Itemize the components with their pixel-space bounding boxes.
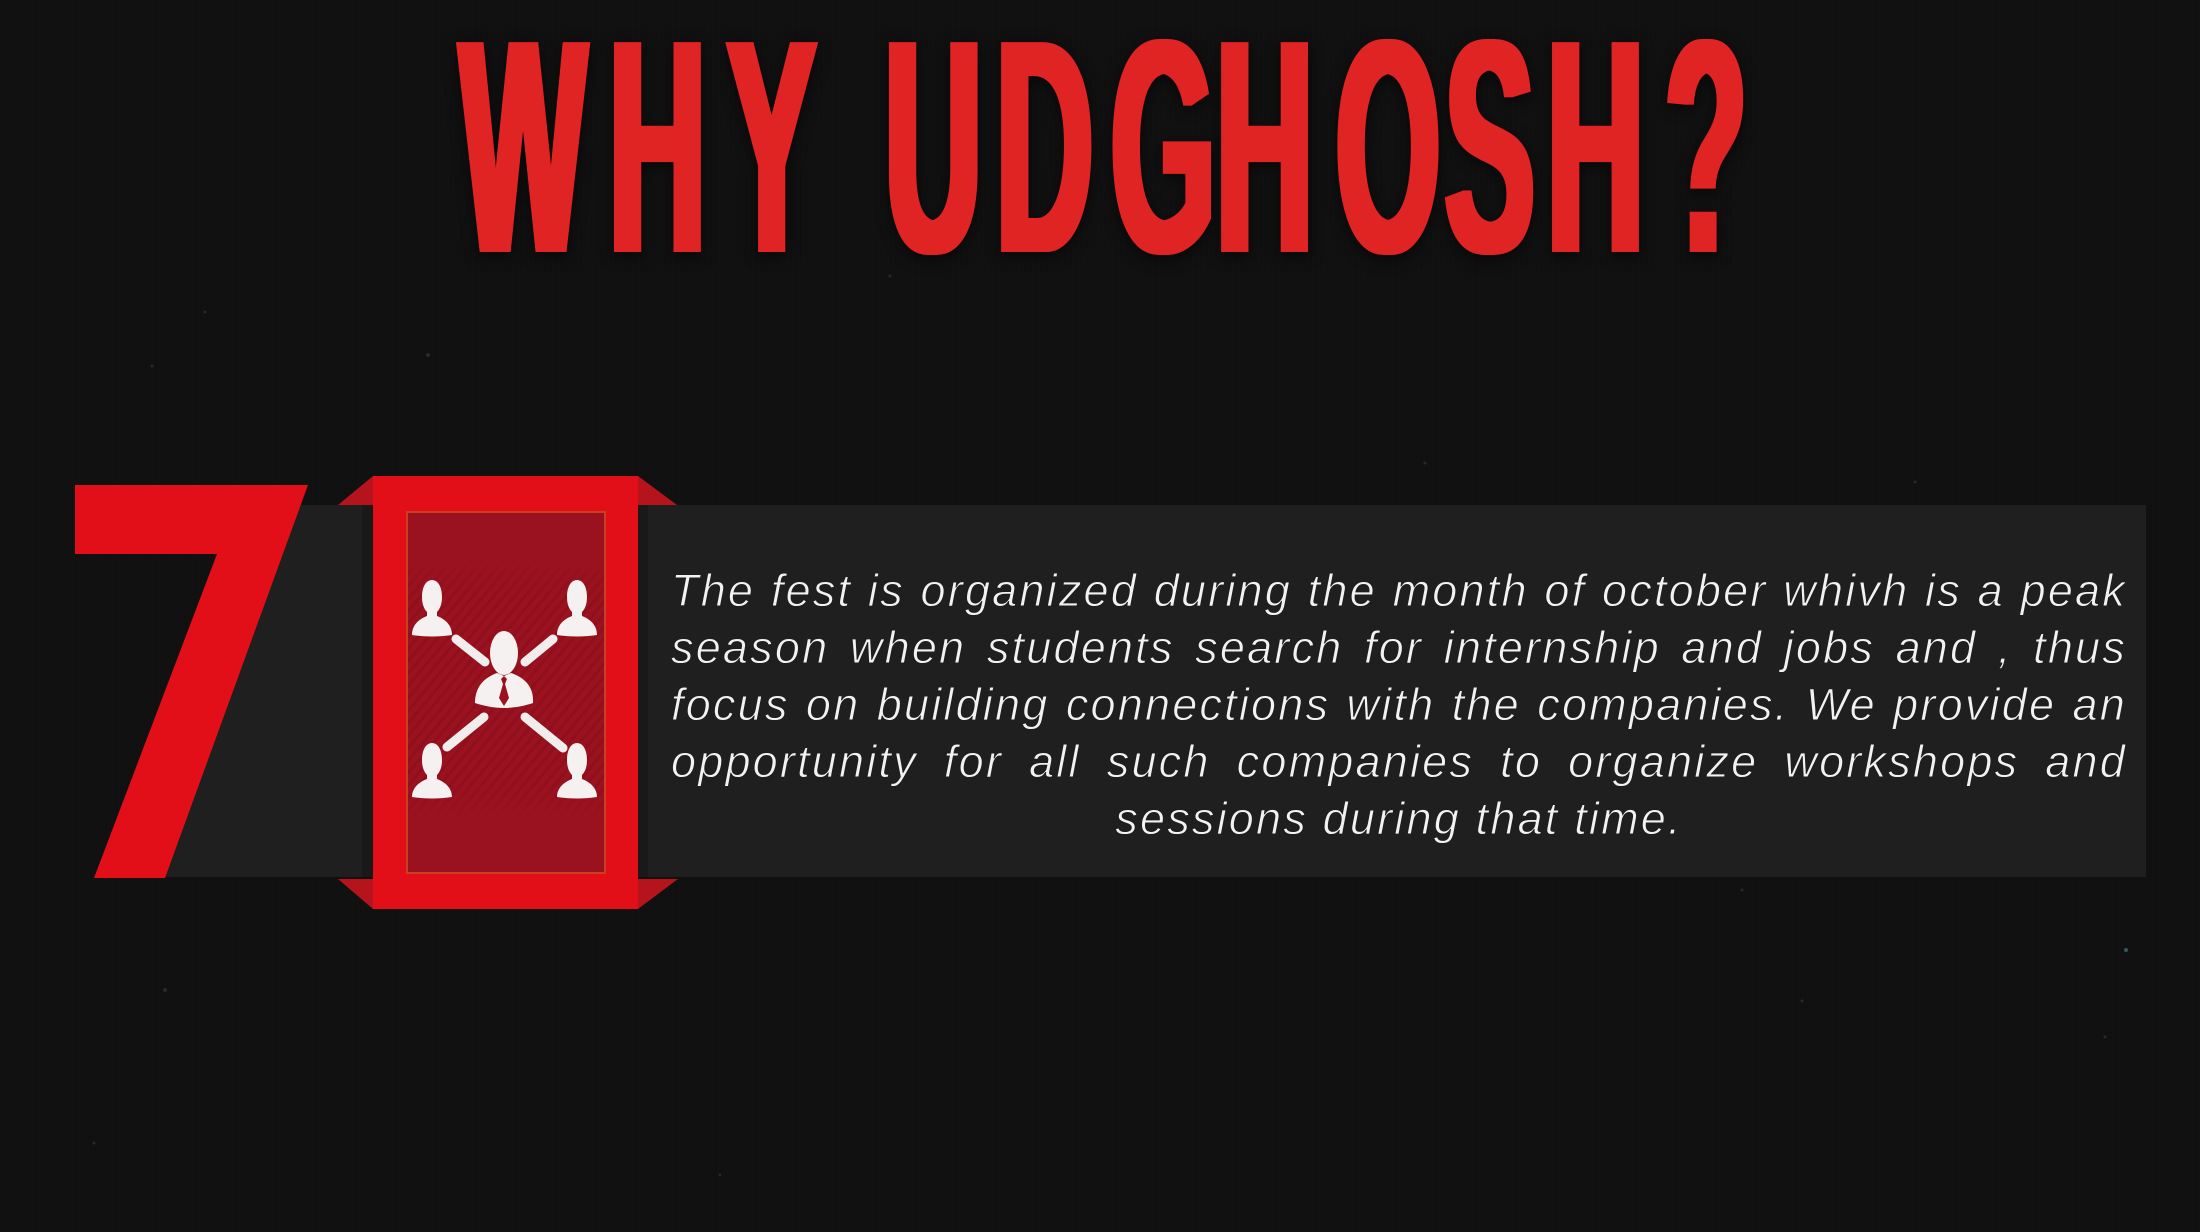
person top left	[412, 580, 452, 636]
body text	[671, 565, 2127, 844]
number 7	[75, 485, 308, 878]
person bottom left	[412, 743, 452, 798]
person top right	[557, 580, 597, 636]
person centre	[475, 631, 533, 708]
folded corners	[338, 476, 678, 909]
body text: focus on building connections with the companies. We provide an	[671, 679, 2127, 730]
body text: opportunity for all such companies to organize workshops and	[671, 736, 2127, 787]
body text: season when students search for internship and jobs and , thus	[671, 622, 2127, 673]
red frame	[373, 476, 638, 909]
inner panel	[407, 512, 605, 873]
connectors	[447, 639, 563, 748]
body text: The fest is organized during the month of october whivh is a peak	[671, 565, 2127, 616]
person bottom right	[557, 743, 597, 798]
frame shadows	[362, 505, 373, 877]
icon: network of people	[412, 580, 597, 798]
panel: text band	[165, 505, 2146, 877]
body text: sessions during that time.	[1115, 793, 1683, 844]
icon card	[338, 476, 678, 909]
striped area	[408, 557, 604, 823]
background specks	[92, 274, 2128, 1176]
